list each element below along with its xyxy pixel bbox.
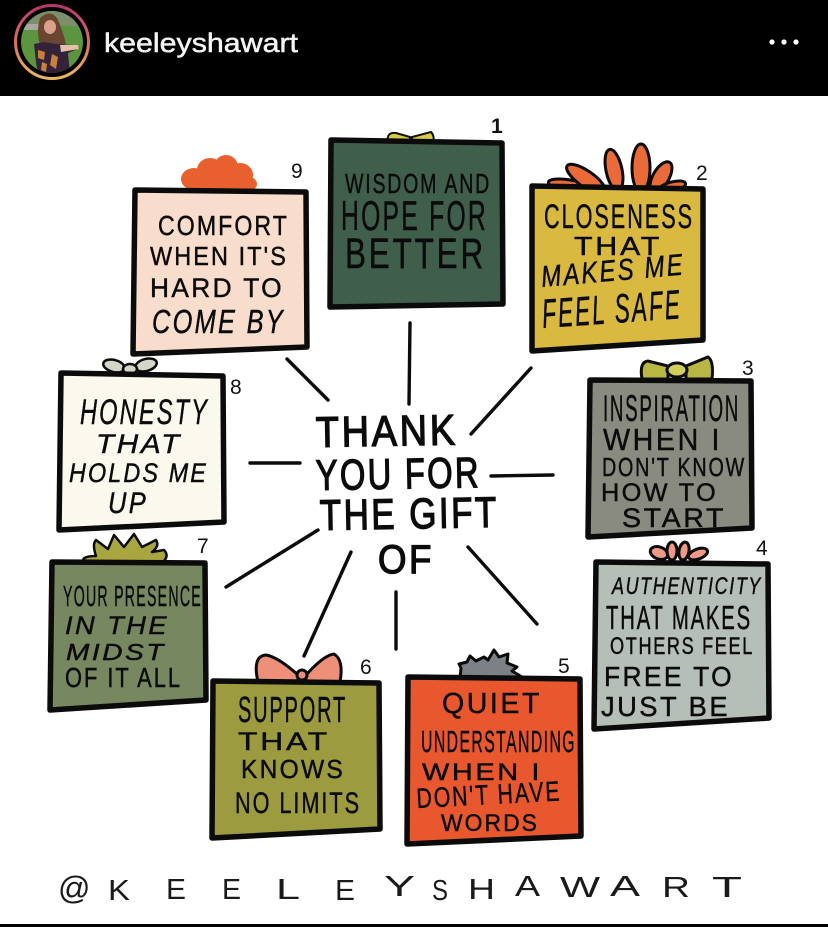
gift 8: honesty: HONESTY [80, 393, 209, 432]
gift 3: inspiration: 3 [742, 357, 754, 380]
box 5 [407, 677, 581, 844]
gift 5: quiet understanding: WORDS [441, 810, 539, 837]
centre heading: OF [378, 538, 434, 582]
gift 3: inspiration: START [622, 503, 726, 533]
gift 5: quiet understanding: WHEN I [422, 759, 542, 786]
gift 2: closeness: FEEL SAFE [540, 281, 683, 337]
more menu dots [769, 39, 799, 45]
gift 6: support [212, 654, 380, 838]
bow 7 [83, 534, 167, 563]
gift 5: quiet understanding: 5 [558, 655, 570, 678]
footer handle: S [432, 875, 448, 907]
box 9 [133, 190, 307, 354]
box 7 [50, 562, 206, 710]
gift 9: comfort: COMFORT [158, 210, 289, 241]
centre heading: THANK [315, 407, 458, 457]
gift 6: support: 6 [360, 656, 372, 679]
gift 2: closeness: MAKES ME [540, 249, 686, 294]
gift 6: support: NO LIMITS [235, 787, 361, 820]
avatar [16, 6, 88, 78]
footer handle: E [166, 874, 186, 906]
gift 2: closeness: CLOSENESS [544, 198, 694, 236]
gift 4: authenticity: OTHERS FEEL [610, 633, 754, 660]
bow 2 [547, 144, 687, 199]
bow 4 [648, 541, 709, 562]
gift 1: wisdom [330, 115, 503, 307]
box 3 [588, 380, 752, 537]
gift 8: honesty: THAT [96, 429, 182, 459]
gift 4: authenticity: FREE TO [604, 661, 734, 692]
bottom edge [0, 924, 828, 927]
gift 2: closeness: 2 [696, 162, 708, 185]
footer handle: K [108, 875, 131, 907]
footer handle: E [335, 875, 355, 907]
box 8 [59, 373, 224, 530]
gift 6: support: KNOWS [241, 754, 345, 784]
bow 8 [102, 356, 158, 375]
box 6 [212, 681, 380, 838]
gift 2: closeness [532, 144, 708, 351]
footer handle: @ [58, 870, 90, 906]
bow 5 [459, 650, 522, 683]
gift 4: authenticity: JUST BE [601, 691, 730, 722]
gift 8: honesty: 8 [230, 376, 242, 399]
gift 3: inspiration: WHEN I [603, 422, 722, 457]
box 1 [330, 140, 503, 307]
gift 7: your presence: OF IT ALL [65, 662, 182, 693]
gift 4: authenticity: AUTHENTICITY [611, 573, 762, 600]
gift 1: wisdom: WISDOM AND [345, 168, 491, 199]
footer handle: A [610, 871, 641, 903]
centre heading: THE GIFT [319, 489, 499, 540]
gift 7: your presence: IN THE [65, 612, 169, 640]
gift 9: comfort: HARD TO [150, 273, 284, 303]
gift 7: your presence: 7 [197, 535, 209, 558]
connector lines [226, 323, 553, 656]
gift 3: inspiration: HOW TO [601, 479, 718, 507]
gift 8: honesty: HOLDS ME [69, 458, 208, 488]
gift 6: support: SUPPORT [238, 689, 347, 730]
gift 5: quiet understanding [407, 650, 581, 844]
footer handle: H [468, 874, 495, 906]
gift 1: wisdom: HOPE FOR [341, 192, 488, 239]
centre heading [315, 407, 499, 582]
bow 1 [388, 132, 434, 143]
gift 5: quiet understanding: QUIET [442, 688, 542, 720]
bow 3 [641, 357, 712, 379]
gift 5: quiet understanding: DON'T HAVE [416, 775, 562, 814]
gift 9: comfort: 9 [291, 160, 303, 183]
gift 8: honesty: UP [108, 487, 148, 520]
bow 6 [256, 654, 341, 682]
gift 4: authenticity: 4 [756, 537, 768, 560]
gift 7: your presence [50, 534, 209, 710]
footer handle: L [276, 874, 300, 906]
username: keeleyshawart [104, 28, 299, 58]
gift 9: comfort: COME BY [152, 303, 285, 340]
box 2 [532, 186, 703, 351]
centre heading: YOU FOR [315, 449, 481, 500]
footer handle: W [560, 872, 601, 904]
profile header [0, 0, 828, 96]
footer handle [58, 870, 742, 907]
gift 4: authenticity [594, 537, 769, 729]
footer handle: E [222, 874, 241, 906]
footer handle: Y [384, 871, 415, 903]
gift 7: your presence: MIDST [66, 639, 166, 665]
gift 7: your presence: YOUR PRESENCE [63, 581, 202, 613]
gift 1: wisdom: BETTER [345, 230, 486, 278]
footer handle: R [662, 872, 690, 904]
box 4 [594, 562, 769, 729]
footer handle: A [515, 871, 541, 903]
gift 1: wisdom: 1 [491, 115, 503, 138]
gift 5: quiet understanding: UNDERSTANDING [421, 724, 576, 759]
gift 8: honesty [59, 356, 242, 530]
gift 3: inspiration: DON'T KNOW [602, 452, 746, 482]
gift 9: comfort: WHEN IT'S [150, 241, 288, 271]
gift 6: support: THAT [238, 728, 330, 756]
footer handle: T [712, 872, 742, 904]
gift 3: inspiration [588, 357, 754, 537]
bow 9 [181, 155, 257, 192]
gift 9: comfort [133, 155, 307, 354]
gift 2: closeness: THAT [574, 231, 662, 261]
